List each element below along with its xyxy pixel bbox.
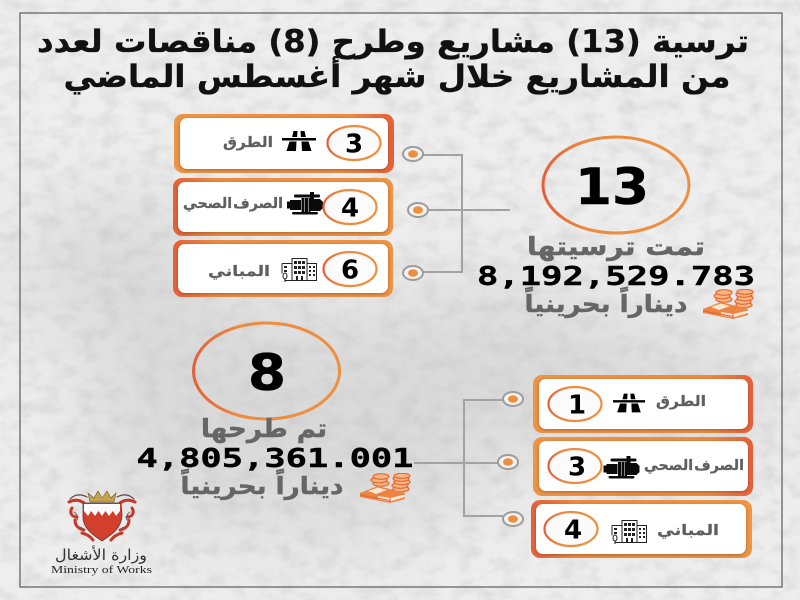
- card: roads 3: 3: [345, 130, 363, 160]
- card: buildings 6: المباني: [208, 264, 270, 280]
- stat: 8 tendered: ديناراً بحرينياً: [180, 469, 344, 500]
- card: buildings 6: [173, 240, 393, 297]
- card: roads 3: [174, 114, 394, 173]
- card: roads 3: الطرق: [223, 135, 273, 151]
- title: ترسية (13) مشاريع وطرح (8) مناقصات لعدد: [37, 24, 749, 60]
- stat: 8 tendered: 8: [248, 344, 286, 402]
- card: sanitation 4: 4: [341, 194, 359, 224]
- stat: 13 awarded: [477, 137, 755, 319]
- title: من المشاريع خلال شهر أغسطس الماضي: [64, 56, 730, 95]
- card: buildings 6: 6: [341, 256, 359, 286]
- card: buildings 4: [531, 500, 752, 558]
- card: sanitation 4: [173, 178, 393, 236]
- logo: Ministry of Works: وزارة الأشغال: [55, 545, 147, 564]
- card: sanitation 4: الصرف الصحي: [183, 196, 283, 212]
- icon: money: [360, 473, 410, 503]
- card: buildings 4: 4: [564, 516, 582, 546]
- card: roads 1: [533, 375, 753, 433]
- connector: awarded projects: [403, 147, 510, 280]
- logo: Ministry of Works: [51, 491, 152, 576]
- stat: 13 awarded: 8,192,529.783: [477, 262, 755, 292]
- icon: money: [703, 289, 753, 319]
- emblem: [69, 491, 135, 541]
- card: sanitation 3: [533, 437, 753, 496]
- card: buildings 4: المباني: [657, 523, 719, 539]
- stat: 13 awarded: 13: [575, 158, 649, 216]
- stat: 13 awarded: تمت ترسيتها: [527, 232, 705, 262]
- stat: 13 awarded: ديناراً بحرينياً: [524, 287, 688, 318]
- card: roads 1: 1: [568, 390, 586, 420]
- card: sanitation 3: الصرف الصحي: [644, 458, 744, 474]
- card: roads 1: الطرق: [656, 394, 706, 410]
- title: [37, 24, 749, 95]
- stat: 8 tendered: تم طرحها: [201, 414, 327, 444]
- stat: 8 tendered: 4,805,361.001: [136, 444, 414, 474]
- logo: Ministry of Works: Ministry of Works: [51, 565, 152, 576]
- stat: 8 tendered: [136, 323, 414, 503]
- card: sanitation 3: 3: [568, 452, 586, 482]
- connector: tendered projects: [414, 392, 523, 526]
